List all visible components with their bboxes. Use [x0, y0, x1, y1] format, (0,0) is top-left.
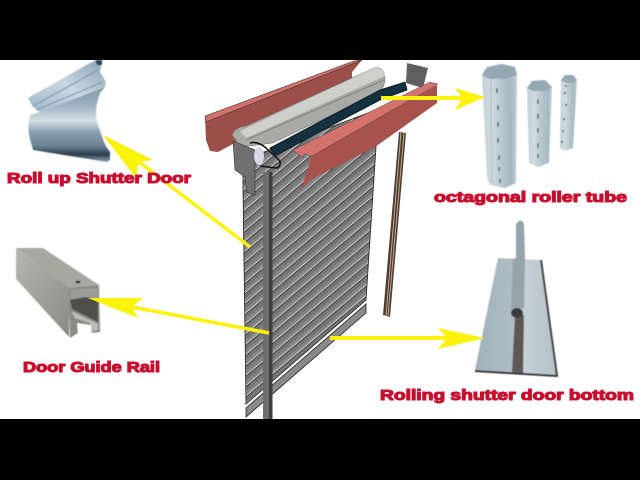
arrow: to guide rail	[88, 298, 269, 333]
back guide rail	[383, 132, 406, 317]
front guide rail	[263, 172, 272, 419]
arrow: to bottom bar	[330, 328, 485, 349]
spring tube	[270, 82, 407, 156]
arrow: to roller tube	[381, 88, 485, 110]
small tube	[560, 75, 577, 151]
icon: roll up shutter slat profile	[28, 60, 110, 162]
front red housing	[293, 82, 438, 190]
label: rolling shutter door bottom: Rolling shutter door bottom	[380, 388, 634, 404]
icon: door guide rail	[16, 248, 100, 338]
back end plate	[406, 63, 428, 88]
label: door guide rail: Door Guide Rail	[23, 360, 160, 376]
roller drum	[232, 68, 385, 146]
medium tube	[527, 80, 552, 167]
label: roll up shutter door: Roll up Shutter Door	[7, 171, 191, 187]
arrow: to shutter slat	[103, 135, 250, 247]
gear and end cap	[233, 141, 280, 195]
bottom black bar	[0, 419, 640, 480]
slatted curtain	[243, 110, 376, 404]
top black bar	[0, 0, 640, 60]
label: octagonal roller tube: octagonal roller tube	[434, 190, 627, 206]
white background	[0, 60, 640, 419]
large tube	[482, 64, 517, 188]
shutter door assembly	[205, 60, 438, 419]
bottom slat	[246, 304, 366, 417]
icon: octagonal roller tubes	[482, 64, 577, 188]
icon: rolling shutter door bottom bar	[475, 220, 558, 377]
rear red housing	[205, 60, 362, 152]
